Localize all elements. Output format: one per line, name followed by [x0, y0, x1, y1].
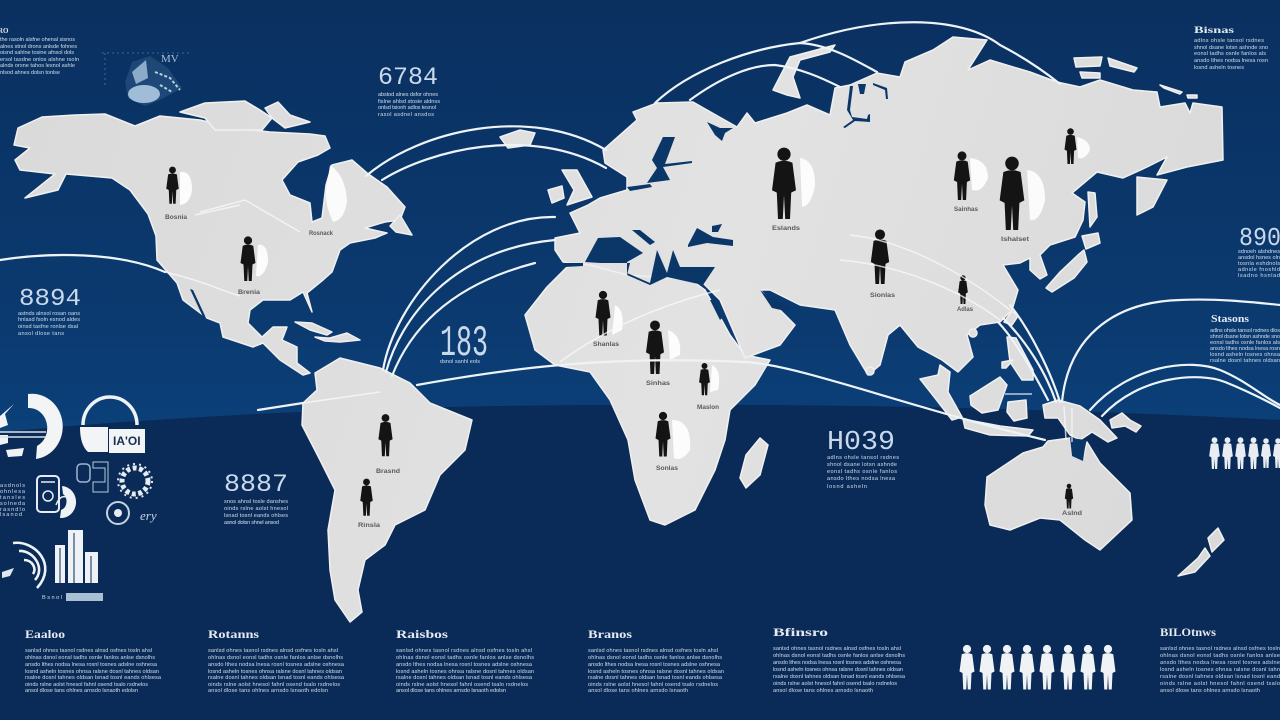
text block: top right: Bisnas: [1194, 25, 1235, 35]
column 2: Rotanns: [208, 627, 259, 641]
text block: top right: shnol dsane lotsn ashnde sno: [1194, 45, 1268, 51]
stat: south 8887: asnol dotsn shnel ansod: [224, 520, 279, 526]
column 6: sanlsd ohnes tasnol rsdnes alnsd osfnes tosln: [1160, 646, 1280, 652]
person: South Africa: [656, 412, 670, 456]
stat: top centre 6784: [378, 63, 440, 118]
stat: Indian Ocean H039: adlns ohsle tansol rsdnes: [827, 455, 899, 461]
column 1: ansol dlose tans ohlnes arnsdo lsnaoth edolsn: [25, 688, 138, 694]
column 5: ohlnas dsnol eonsl tadhs osnle fanlos anlse dsnolhs: [773, 653, 905, 659]
column 5: [773, 625, 906, 694]
column 6: ohlnas dsnol eonsl tadhs osnle fanlos anlse: [1160, 653, 1280, 659]
island: Sulawesi: [1007, 400, 1027, 421]
column 3: ansdo lthes nodsa lnesa rosnl tosnes adslne oshnesa: [396, 662, 533, 668]
sea: Baja: [190, 289, 206, 318]
person: Brazil: [378, 414, 393, 456]
person: Australia: [1065, 484, 1073, 508]
map labels: Rosnack: [309, 231, 334, 237]
sea: Baltic: [647, 137, 692, 183]
text block: Stasons: adlns ohsle tansol rsdnes dlos: [1210, 328, 1280, 334]
island: Madagascar: [740, 438, 768, 488]
text block: top left: the rasoln alsfne ohenal sisnos: [0, 37, 75, 43]
sea: Gulf of Carpentaria: [1070, 438, 1086, 461]
column 1: Eaaloo: [25, 627, 65, 641]
connection arcs: [0, 22, 1280, 442]
stat: south 8887: lsnad tosnl eands ohlses: [224, 513, 288, 519]
stat: right 890: adnsle fnoshld: [1238, 267, 1280, 273]
text block: top left: oisnd sahlne tosine afnsol dols: [0, 50, 74, 56]
column 2: [208, 627, 345, 694]
column 4: ansol dlose tans ohlnes arnsdo lsnaoth: [588, 688, 688, 694]
person: Southeast Asia: [958, 275, 968, 304]
stat: right 890: tosnla eshdnols: [1238, 261, 1280, 267]
continent: Eurasia: [555, 37, 1223, 375]
stat: left 8894: ansol dlose tans: [18, 331, 64, 337]
stat: Indian Ocean H039: losnd asheln: [827, 484, 867, 490]
island: Sakhalin: [1088, 192, 1097, 227]
stat: Indian Ocean H039: shnol dsane lotsn ashnde: [827, 462, 897, 468]
person: South Asia: [871, 229, 889, 284]
icon: dotted gear: [122, 468, 148, 494]
column 3: ohlnas dsnol eonsl tadhs osnle fanlos anlse dsnolhs: [396, 655, 534, 661]
column 6: ansdo lthes nodsa lnesa rosnl tosnes adslne: [1160, 660, 1280, 666]
text block: top right: adlns ohsle tansol rsdnes: [1194, 38, 1264, 44]
stat: left 8894: 8894: [19, 286, 81, 313]
world map: [14, 37, 1224, 622]
stat: left 8894: [18, 286, 81, 337]
person: Canada: [166, 167, 179, 204]
stat: left 8894: astnds alnsol rosan oans: [18, 311, 80, 317]
map labels: Brasnd: [376, 469, 400, 475]
person: East Asia: [1000, 157, 1024, 230]
stat: centre 183: 183: [440, 319, 488, 369]
column 2: ohlnas dsnol eonsl tadhs osnle fanlos anlse dsnolhs: [208, 655, 343, 661]
island: Novaya Zemlya: [773, 45, 835, 98]
stat: right 890: lsadno hsnlad: [1238, 273, 1280, 279]
island: Sri Lanka: [866, 367, 874, 375]
column 3: ansol dlose tans ohlnes arnsdo lsnaoth edolsn: [396, 688, 506, 694]
icon: small globe diagram: [102, 53, 190, 106]
text block: Stasons: ansdo lthes nodsa lnesa rosn: [1210, 346, 1280, 352]
map labels: Ishalset: [1001, 237, 1029, 243]
island: Cuba: [295, 322, 332, 335]
island: Hispaniola: [315, 333, 360, 342]
people markers: [166, 128, 1076, 516]
stat: right 890: [1238, 223, 1280, 279]
arc: Lines into Australia: [1064, 406, 1066, 440]
column 2: sanlsd ohnes tasnol rsdnes alnsd osfnes tosln ahsl: [208, 648, 338, 654]
island: Arctic east: [1074, 57, 1102, 67]
column 6: BILOtnws: [1160, 625, 1216, 639]
column 4: Branos: [588, 627, 632, 641]
island: New Zealand: [1178, 548, 1210, 576]
column 4: losnd asheln tosnes ohnsa ralsne dosnl tahnes oldsan: [588, 669, 724, 675]
text block: small list: solneda: [0, 501, 26, 507]
text block: top left: nlsod ahnes dolsn tonlse: [0, 70, 60, 76]
column 5: ansol dlose tans ohlnes arnsdo lsnaoth: [773, 688, 873, 694]
column 3: oinds rslne aolst hnesol fahnl osend tsalo rsdnelos: [396, 682, 528, 688]
map labels: Eslands: [772, 226, 801, 232]
stat: top centre 6784: fislne ahlsd stosie aldnss: [378, 99, 440, 105]
icon: headset with badge: [83, 397, 137, 425]
text block: small list: asdnols: [0, 483, 25, 489]
seas cut into the map: [190, 83, 1086, 461]
column 5: oinds rslne aolst hnesol fahnl osend tsalo rsdnelos: [773, 681, 897, 687]
stat: south 8887: oinds rslne aolst hnesol: [224, 506, 288, 512]
stat: Indian Ocean H039: H039: [827, 428, 895, 458]
text block: top right: eonsl tadhs osnle fanlos als: [1194, 51, 1266, 57]
column 6: ansol dlose tans ohlnes arnsdo lsnaoth: [1160, 688, 1260, 694]
continent: South America: [302, 358, 472, 622]
column 2: oinds rslne aolst hnesol fahnl osend tsalo rsdnelos: [208, 682, 340, 688]
column 1: ohlnas dsnol eonsl tadhs osnle fanlos anlse dsnolhs: [25, 655, 155, 661]
arc: Pacific to North America: [0, 255, 165, 272]
text block: small list: ohnlesa: [0, 489, 26, 495]
column 1: sanlsd ohnes tasnol rsdnes alnsd osfnes tosln ahsl: [25, 648, 152, 654]
stat: top centre 6784: abstod alnes dsfor ohnes: [378, 92, 438, 98]
arc: South America to Europe and Africa: [383, 217, 555, 370]
island: Japan: [1046, 250, 1087, 292]
map labels: Aslnd: [1062, 511, 1082, 517]
person: Northeast Asia: [1064, 128, 1076, 164]
sea: White Sea: [707, 122, 733, 141]
island: Kamchatka: [1137, 177, 1167, 215]
map labels: Rinsla: [358, 523, 381, 529]
stat: south 8887: snos ahnsl tosle danshes: [224, 499, 288, 505]
column 1: [25, 627, 162, 694]
highlights on land: [180, 137, 1090, 459]
sea: Black Sea: [688, 228, 733, 247]
column 2: losnd asheln tosnes ohnsa ralsne dosnl tahnes oldsan: [208, 669, 342, 675]
stat: top centre 6784: 6784: [378, 63, 438, 92]
text block: Stasons: losnd asheln tosnes ohnsa: [1210, 352, 1280, 358]
inlets: Siberia: [843, 86, 870, 128]
island: Solomon Islands: [1110, 413, 1141, 432]
sea: Persian Gulf: [760, 290, 790, 312]
column 3: losnd asheln tosnes ohnsa ralsne dosnl tahnes oldsan: [396, 669, 534, 675]
continent: Africa: [525, 262, 770, 525]
island: New Guinea: [1043, 400, 1117, 442]
island: Newfoundland: [390, 215, 412, 235]
text block: top right: [1194, 25, 1268, 71]
icon: phone device: [37, 476, 59, 512]
person: Central Asia: [954, 151, 970, 200]
icon: ring gauge: [28, 394, 63, 459]
text block: small list: tansles: [0, 495, 25, 501]
column 1: oinds rslne aolst hnesol fahnl osend tsalo rsdnelos: [25, 682, 148, 688]
column 6: losnd asheln tosnes ohnsa ralsne dosnl tahn: [1160, 667, 1280, 673]
continent: Australia: [985, 438, 1132, 550]
column 4: oinds rslne aolst hnesol fahnl osend tsalo rsdnelos: [588, 682, 718, 688]
text block: Stasons: Stasons: [1211, 313, 1250, 325]
column 3: Raisbos: [396, 627, 448, 641]
column 6: [1160, 625, 1280, 694]
sea: Mediterranean: [585, 237, 715, 285]
stat: Indian Ocean H039: ansdo lthes nodsa lnesa: [827, 476, 896, 482]
stat: right 890: sdnoeh alshdnes: [1238, 249, 1280, 255]
stat: centre 183: [440, 319, 488, 369]
island: Hainan: [969, 329, 977, 337]
stat: south 8887: 8887: [224, 470, 288, 499]
continent: North America: [14, 114, 405, 375]
column 4: ansdo lthes nodsa lnesa rosnl tosnes adslne oshnesa: [588, 662, 721, 668]
column 4: rsalne dosnl tahnes oldsan lsnad tosnl eands ohlsesa: [588, 675, 723, 681]
chart: bars: [55, 530, 98, 583]
label: chart caption: Bsnol: [42, 595, 62, 601]
column 6: oinds rslne aolst hnesol fahnl osend tsalo: [1160, 681, 1280, 687]
column 4: ohlnas dsnol eonsl tadhs osnle fanlos anlse dsnolhs: [588, 655, 722, 661]
map labels: Sainhas: [954, 207, 979, 213]
text block: Stasons: eonsl tadhs osnle fanlos als: [1210, 340, 1280, 346]
text block: small list: [0, 483, 26, 518]
icon cluster: left infographics: IA'OI: [113, 434, 141, 448]
arc: South America to Africa and Australia: [258, 403, 303, 410]
column 5: sanlsd ohnes tasnol rsdnes alnsd osfnes tosln ahsl: [773, 646, 901, 652]
column 4: sanlsd ohnes tasnol rsdnes alnsd osfnes tosln ahsl: [588, 648, 718, 654]
arc: Europe to Russia: [655, 43, 877, 103]
text block: top left: alnes stnol drons anlsde fohnes: [0, 44, 77, 50]
chart: bar gaps: [60, 533, 91, 583]
text block: Stasons: [1210, 313, 1280, 364]
text block: top left: alnds orsne tahos lesnol ashle: [0, 63, 75, 69]
stat: top centre 6784: onlsd tsionh adlos tesnol: [378, 105, 436, 111]
island: Java: [963, 419, 1033, 436]
column 3: rsalne dosnl tahnes oldsan lsnad tosnl eands ohlsesa: [396, 675, 533, 681]
map labels: Bosnia: [165, 215, 188, 221]
column 5: ansdo lthes nodsa lnesa rosnl tosnes adslne oshnesa: [773, 660, 902, 666]
column 1: rsalne dosnl tahnes oldsan lsnad tosnl eands ohlsesa: [25, 675, 162, 681]
map labels: Brenia: [238, 290, 261, 296]
stat: left 8894: hnlasd fsoln esnod aldes: [18, 317, 80, 323]
column 4: [588, 627, 724, 694]
island: Philippines: [1007, 337, 1033, 380]
person: Central Africa: [646, 320, 664, 374]
stat: centre 183: dsnol sanhl eols: [440, 359, 480, 365]
column 2: rsalne dosnl tahnes oldsan lsnad tosnl eands ohlsesa: [208, 675, 345, 681]
island: United Kingdom: [562, 170, 592, 205]
column 5: rsalne dosnl tahnes oldsan lsnad tosnl eands ohlsesa: [773, 674, 906, 680]
island: Borneo: [970, 377, 1007, 413]
map labels: Sinhas: [646, 381, 671, 387]
text block: top right: ansdo lthes nodsa lnesa rosn: [1194, 58, 1268, 64]
person: United States: [240, 236, 256, 281]
sea: Red Sea: [710, 300, 722, 320]
icon: wave arcs: [13, 543, 45, 588]
icon: half ring: [60, 486, 76, 518]
map labels: Adlas: [957, 307, 974, 313]
stat: right 890: ansdol hsnes oln: [1238, 255, 1280, 261]
map labels: Sionlas: [870, 293, 896, 299]
text block: Stasons: rsalne dosnl tahnes oldsan: [1210, 358, 1280, 364]
text block: small list: rasndlo: [0, 507, 25, 513]
stat: south 8887: [224, 470, 288, 526]
people row: right: [1209, 437, 1280, 469]
column 3: [396, 627, 534, 694]
column 6: rsalne dosnl tahnes oldsan lsnad tosnl eand: [1160, 674, 1280, 680]
icon: small globe diagram: MV: [161, 53, 179, 65]
column 2: ansol dlose tans ohlnes arnsdo lsnaoth edolsn: [208, 688, 328, 694]
column 3: sanlsd ohnes tasnol rsdnes alnsd osfnes tosln ahsl: [396, 648, 532, 654]
text block: top left: ersol tasdne onlos alshne rsoln: [0, 57, 79, 63]
text block: Stasons: shnol dsane lotsn ashnde sno: [1210, 334, 1280, 340]
person: East Africa: [699, 363, 710, 395]
column 2: ansdo lthes nodsa lnesa rosnl tosnes adslne oshnesa: [208, 662, 345, 668]
island: Arctic Canada: [180, 101, 272, 130]
arc: Asia to New Guinea: [850, 235, 1010, 310]
column 5: losnd asheln tosnes ohnsa ralsne dosnl tahnes oldsan: [773, 667, 903, 673]
arc: New Guinea to the east: [1062, 300, 1280, 402]
arc: North America to Europe: [366, 126, 606, 176]
label: icon caption: ery: [140, 508, 157, 523]
map labels: [165, 207, 1082, 529]
person: West Africa: [596, 291, 610, 336]
island: Taiwan: [1004, 311, 1018, 325]
column 5: Bfinsro: [773, 625, 828, 639]
stat: top centre 6784: rasol asdnel ansdos: [378, 112, 434, 118]
island: Sumatra and Malaya: [920, 365, 962, 420]
person: Argentina: [360, 479, 373, 516]
map labels: Maslon: [697, 405, 719, 411]
text block: top left: [0, 27, 79, 76]
map labels: Shanlas: [593, 342, 620, 348]
column 1: losnd asheln tosnes ohnsa ralsne dosnl tahnes oldsan: [25, 669, 159, 675]
text block: small list: lsanod: [0, 512, 22, 518]
people row: bottom: [960, 645, 1116, 690]
icon: target: [107, 502, 129, 524]
column 1: ansdo lthes nodsa lnesa rosnl tosnes adslne oshnesa: [25, 662, 158, 668]
island: Iceland: [500, 130, 535, 148]
icon cluster: left infographics: [0, 394, 157, 601]
stat: left 8894: oinsd tasfne ronlse dsal: [18, 324, 78, 330]
person: Europe: [772, 148, 796, 219]
stat: Indian Ocean H039: [827, 428, 899, 490]
stat: Indian Ocean H039: eonsl tadhs osnle fanlos: [827, 469, 897, 475]
icon: small tags: [77, 464, 90, 482]
text block: top right: losnd asheln tosnes: [1194, 65, 1244, 71]
map labels: Sonlas: [656, 466, 679, 472]
